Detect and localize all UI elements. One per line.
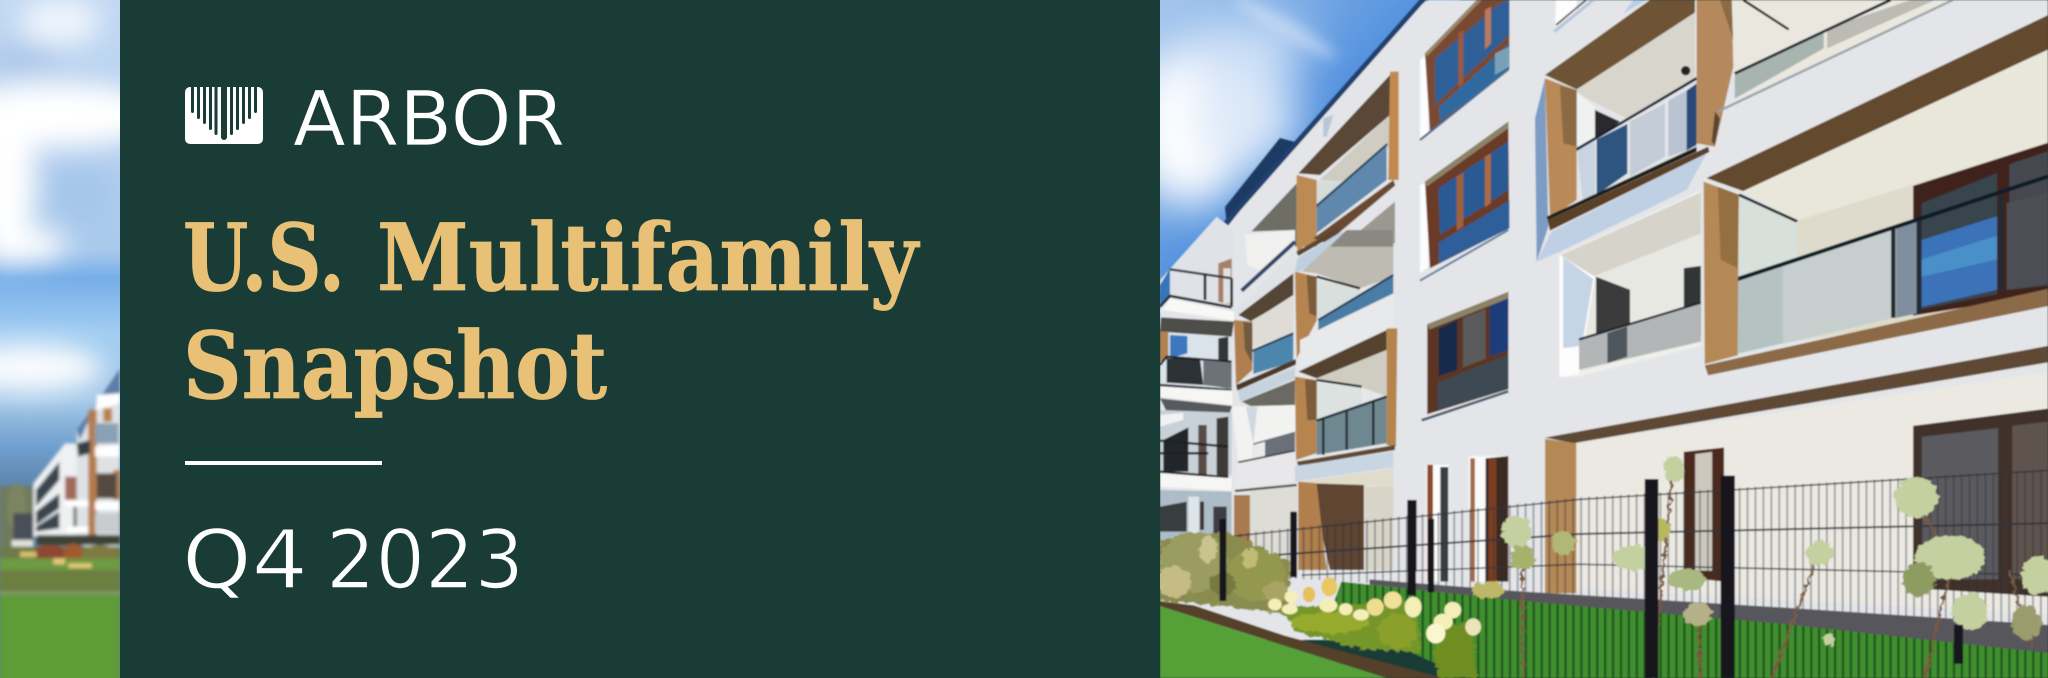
lower facade, big balcony and ground [1160,0,2048,678]
divider rule [185,461,382,465]
walkway [1370,579,2048,653]
top balcony, right [1718,0,1953,112]
fence upper section [1234,469,2048,636]
wall shadow [1535,78,1548,262]
ground floor and soffit [1545,346,2048,614]
hydrangea bushes [1279,601,1477,678]
subtitle: quarter: 2023 [326,515,524,608]
window 1 [1420,53,1428,140]
column three [1295,230,1393,482]
title: U.S. [183,203,345,312]
subtitle: quarter [182,515,524,608]
column one [1160,217,1234,312]
title: Snapshot [183,311,607,420]
lawn behind fence [1330,582,2048,678]
foreground lawn and mulch [1160,601,1443,678]
fence posts [1219,476,1963,678]
subtitle: quarter: Q4 [182,515,308,608]
balcony interior [1577,13,1695,118]
photo: apartment building facade [1160,0,2048,678]
photo: left strip with distant building, sky and lawn [0,0,120,678]
hydrangea flowers [1268,577,1481,643]
top small window [1555,0,1577,27]
roof edge [1160,0,1428,298]
foliage: shrubs, hydrangeas and saplings [1157,456,2048,678]
saplings [1522,476,2032,678]
column two [1234,230,1295,310]
large balcony, right [1704,15,2048,375]
windows column and upper balcony, column five [1420,0,1733,281]
panel: dark green title panel [120,0,1160,678]
shrubs, left [1157,532,1291,614]
window 3 and balcony column five, middle [1422,190,1701,420]
title [183,203,921,420]
window 2 [1420,182,1428,273]
ground floor doors in windows column [1426,456,1508,582]
sky with clouds [1128,0,1460,330]
icon: Arbor logo mark [185,87,263,144]
upper balcony, column three and top of column two [1245,72,1399,247]
columns one to three, lower floors [1160,217,1417,570]
facade wall [1160,0,2048,640]
